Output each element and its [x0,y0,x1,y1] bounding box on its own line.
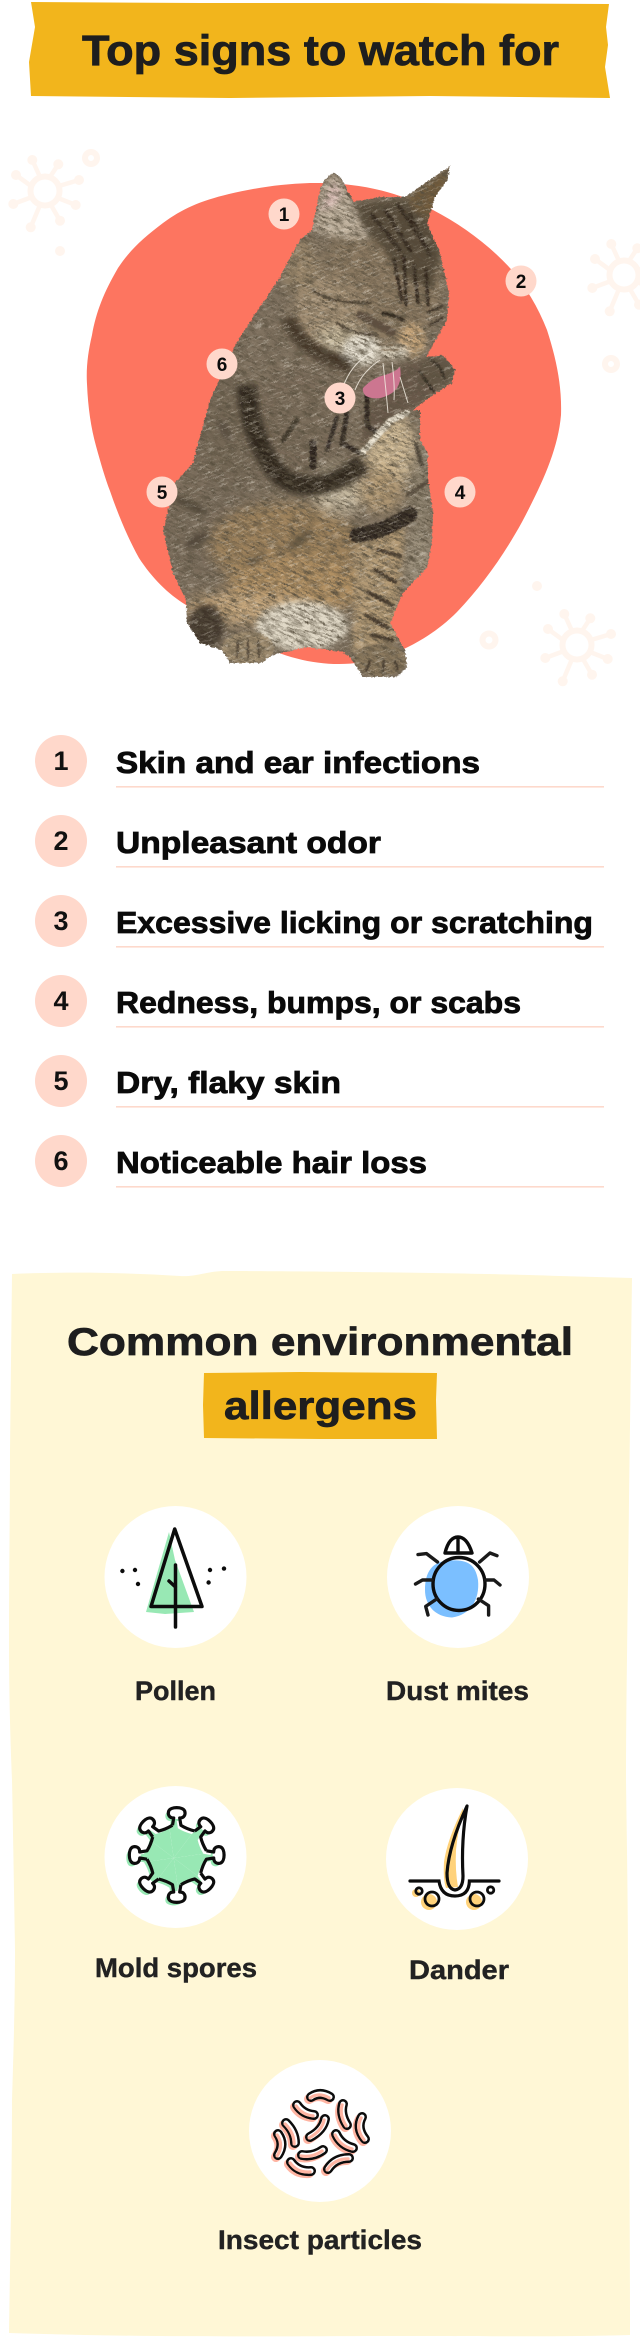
list item 2 [35,815,604,868]
label: Dust mites [386,1676,529,1706]
marker 6 [206,348,238,380]
icon: mite [416,1537,500,1618]
list item 3: 3 [53,906,69,936]
list item 5 [35,1055,604,1108]
whiskers [343,352,408,413]
signs list [35,735,604,1188]
marker 5 [146,476,178,508]
allergen: mold spores [95,1786,257,1983]
allergen: insect particles [218,2060,422,2255]
paws [222,632,407,676]
label: Pollen [135,1676,216,1706]
allergen: pollen [104,1506,246,1706]
list item 4: 4 [53,986,69,1016]
list item 1 [35,735,604,788]
list item 5: Dry, flaky skin [116,1065,341,1100]
list item 2: Unpleasant odor [116,825,381,860]
list item 6: Noticeable hair loss [116,1145,427,1180]
ears [312,174,370,240]
title: Top signs to watch for [82,27,559,75]
list item 4: Redness, bumps, or scabs [116,985,521,1020]
marker 1 [268,198,300,230]
list item 1: 1 [53,746,69,776]
panel heading: Common environmental [67,1321,573,1364]
icon: spore [126,1808,224,1905]
list item 6: 6 [53,1146,69,1176]
lower leg [352,525,405,652]
red blob behind cat [87,183,561,664]
allergen: dust mites [386,1506,529,1706]
list item 3 [35,895,604,948]
muzzle and nose [342,334,382,366]
dark haunch [188,604,224,648]
arm stripes [367,397,377,433]
icon: hair follicle [410,1806,499,1910]
label: Mold spores [95,1953,257,1983]
list item 4 [35,975,604,1028]
foreleg band [357,514,410,535]
panel: common environmental allergens [9,1271,632,2336]
marker 4 [444,476,476,508]
icon: tree [120,1529,226,1627]
label: Dander [409,1955,510,1985]
marker 3 [324,382,356,414]
background decorations [8,152,640,686]
shoulder dark band [247,385,363,485]
white belly [256,601,348,651]
cat photo illustration [162,166,456,678]
paw lines [420,360,444,392]
marker 2 [506,266,536,296]
neck collar [288,318,352,366]
head stripes [372,205,430,255]
chest highlight [363,413,407,452]
list item 3: Excessive licking or scratching [116,905,593,940]
list item 5: 5 [53,1066,69,1096]
title banner [29,2,610,98]
icon: particles [276,2094,365,2173]
fur texture [162,166,456,678]
list item 1: Skin and ear infections [116,745,480,780]
label: Insect particles [218,2225,422,2255]
closed eyes [360,315,392,332]
raised arm [358,360,436,448]
marker 5: 5 [157,483,168,504]
head dark top [356,199,440,290]
marker 2: 2 [516,272,526,293]
list item 6 [35,1135,604,1188]
soft fur patches [165,217,442,624]
highlight box [203,1372,437,1439]
marker 3: 3 [335,389,345,410]
highlighted heading word: allergens [224,1385,417,1428]
tongue [363,367,401,398]
marker 1: 1 [279,205,290,226]
marker 4: 4 [455,483,466,504]
list item 2: 2 [53,826,69,856]
marker 6: 6 [217,355,227,376]
allergen: dander [386,1788,528,1985]
muzzle lines [380,345,398,350]
